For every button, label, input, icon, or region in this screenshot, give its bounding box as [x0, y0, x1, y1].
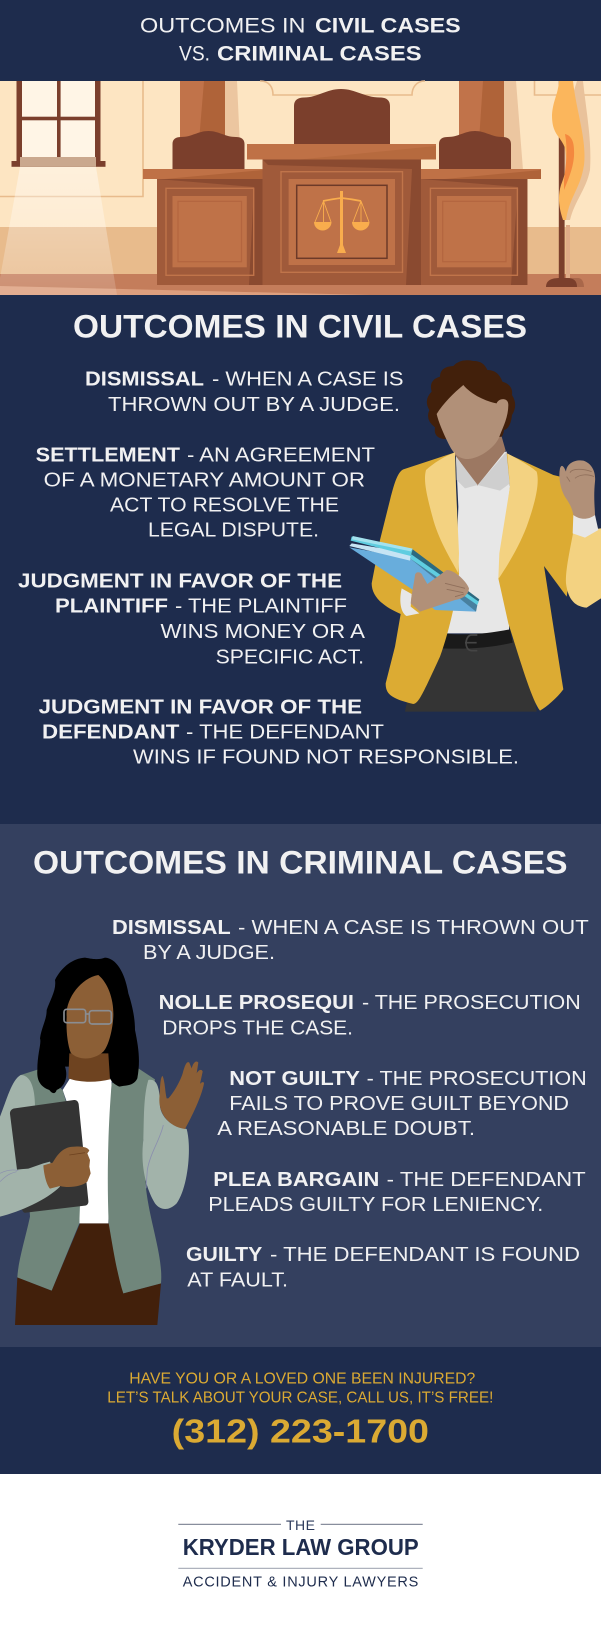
belt — [442, 629, 513, 651]
books — [349, 536, 479, 612]
text: judgment for plaintiff: JUDGMENT IN FAVOR OF THE — [18, 569, 342, 592]
left desk — [143, 169, 263, 285]
text: plea bargain: PLEADS GUILTY FOR LENIENCY. — [208, 1193, 543, 1216]
call to action — [0, 1347, 601, 1474]
heading: outcomes in criminal cases: OUTCOMES IN CRIMINAL CASES — [33, 844, 568, 880]
chairs — [172, 89, 511, 170]
text: judgment for defendant: DEFENDANT — [42, 721, 180, 744]
icon: window — [12, 81, 106, 167]
floor highlight — [0, 286, 370, 295]
trousers — [405, 640, 537, 712]
right sleeve — [142, 1080, 189, 1209]
icon: scales of justice — [314, 191, 370, 253]
hair — [427, 360, 515, 439]
text: settlement: LEGAL DISPUTE. — [148, 519, 319, 542]
raised hand — [159, 1061, 204, 1129]
text: nolle prosequi: - THE PROSECUTION — [362, 991, 581, 1014]
text: plea bargain — [208, 1168, 586, 1216]
holding hand — [411, 570, 469, 612]
header banner — [0, 0, 601, 81]
title: VS. — [179, 42, 210, 66]
text: guilty: GUILTY — [186, 1243, 263, 1266]
text: call to action: HAVE YOU OR A LOVED ONE BEEN INJURED? — [129, 1370, 475, 1387]
text: guilty — [186, 1243, 580, 1292]
text: plea bargain: - THE DEFENDANT — [387, 1168, 586, 1191]
columns — [180, 81, 523, 170]
text: dismissal: THROWN OUT BY A JUDGE. — [108, 393, 400, 416]
title: CIVIL CASES — [315, 14, 461, 38]
sleeve crease — [0, 1170, 18, 1182]
text: nolle prosequi — [159, 991, 581, 1039]
tablet — [10, 1100, 88, 1213]
text: judgment for defendant: JUDGMENT IN FAVOR OF THE — [39, 695, 362, 718]
logo: THE — [286, 1517, 315, 1533]
text: nolle prosequi: NOLLE PROSEQUI — [159, 991, 354, 1014]
heading: outcomes in civil cases: OUTCOMES IN CIVIL CASES — [73, 309, 527, 345]
jacket — [372, 452, 576, 711]
illustration: attorney with tablet — [0, 958, 204, 1325]
right desk — [421, 169, 541, 285]
face — [437, 385, 508, 459]
logo: KRYDER LAW GROUP — [183, 1534, 419, 1560]
panel: criminal cases — [0, 824, 601, 1347]
text: dismissal: BY A JUDGE. — [143, 941, 275, 964]
text: guilty: AT FAULT. — [187, 1269, 288, 1292]
jacket — [17, 1068, 161, 1293]
cuff left — [400, 588, 419, 616]
left forearm — [0, 1162, 60, 1217]
skirt — [15, 1223, 161, 1325]
text: judgment for plaintiff: WINS MONEY OR A — [160, 620, 365, 643]
logo — [178, 1517, 423, 1591]
panel: civil cases — [0, 295, 601, 825]
shirt — [445, 452, 510, 633]
text: dismissal — [85, 368, 404, 416]
text: not guilty: NOT GUILTY — [229, 1067, 360, 1090]
text: judgment for plaintiff: SPECIFIC ACT. — [216, 645, 364, 668]
text: judgment for plaintiff — [18, 569, 365, 668]
title: OUTCOMES IN — [140, 14, 306, 38]
light beam — [0, 167, 117, 295]
text: judgment for defendant: WINS IF FOUND NOT RESPONSIBLE. — [133, 746, 519, 769]
text: guilty: - THE DEFENDANT IS FOUND — [270, 1243, 580, 1266]
text: call to action: LET’S TALK ABOUT YOUR CASE, CALL US, IT’S FREE! — [107, 1389, 493, 1406]
text: settlement — [36, 444, 376, 542]
text: judgment for plaintiff: PLAINTIFF — [55, 595, 168, 618]
text: settlement: ACT TO RESOLVE THE — [110, 494, 339, 517]
title — [140, 14, 461, 66]
neck — [68, 1053, 110, 1082]
face — [66, 975, 113, 1059]
text: not guilty: A REASONABLE DOUBT. — [217, 1117, 475, 1140]
text: not guilty — [217, 1067, 587, 1140]
flag — [546, 81, 590, 287]
glasses — [64, 1009, 111, 1024]
text: not guilty: - THE PROSECUTION — [367, 1067, 587, 1090]
text: dismissal: - WHEN A CASE IS THROWN OUT — [238, 916, 589, 939]
shirt — [63, 1078, 112, 1223]
lapels — [425, 452, 538, 579]
text: judgment for defendant: - THE DEFENDANT — [186, 721, 385, 744]
text: plea bargain: PLEA BARGAIN — [213, 1168, 379, 1191]
illustration: attorney in yellow jacket — [349, 360, 601, 712]
text: settlement: SETTLEMENT — [36, 444, 180, 467]
phone number: (312) 223-1700 — [172, 1413, 429, 1450]
raised hand — [559, 460, 595, 519]
text: settlement: OF A MONETARY AMOUNT OR — [44, 469, 365, 492]
text: judgment for plaintiff: - THE PLAINTIFF — [175, 595, 347, 618]
cuff — [573, 515, 598, 538]
text: dismissal: - WHEN A CASE IS — [212, 368, 404, 391]
raised sleeve — [566, 528, 601, 608]
text: dismissal: DISMISSAL — [85, 368, 204, 391]
upper left arm — [0, 1075, 35, 1183]
collar — [456, 452, 510, 491]
text: judgment for defendant — [39, 695, 519, 769]
title: CRIMINAL CASES — [217, 42, 422, 66]
courtroom illustration — [0, 81, 601, 295]
footer — [0, 1474, 601, 1628]
text: dismissal: DISMISSAL — [112, 916, 231, 939]
center desk — [247, 144, 436, 285]
text: call to action — [107, 1370, 493, 1406]
text: nolle prosequi: DROPS THE CASE. — [162, 1016, 353, 1039]
logo: ACCIDENT & INJURY LAWYERS — [183, 1575, 418, 1591]
text: settlement: - AN AGREEMENT — [187, 444, 376, 467]
hair — [37, 958, 139, 1093]
text: dismissal — [112, 916, 589, 964]
neck — [450, 437, 506, 486]
holding hand — [43, 1146, 91, 1189]
sleeve crease — [146, 1125, 163, 1188]
text: not guilty: FAILS TO PROVE GUILT BEYOND — [229, 1092, 569, 1115]
